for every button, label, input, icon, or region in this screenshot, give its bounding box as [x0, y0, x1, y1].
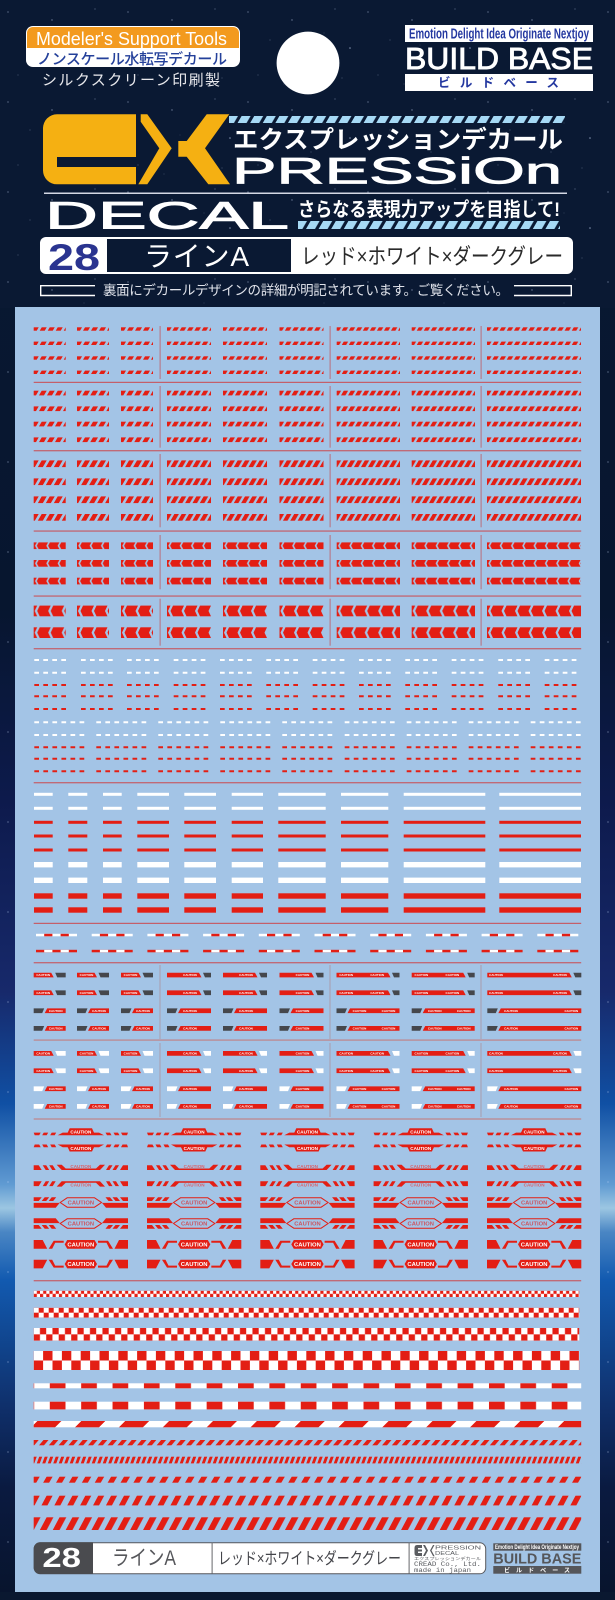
slanted red and white strip — [34, 1421, 581, 1427]
footer label: レッド×ホワイト×ダークグレー — [218, 1549, 401, 1568]
lower blue stripes — [298, 221, 560, 229]
logo: BUILD BASE: BUILD BASE — [405, 41, 593, 76]
footer label: エクスプレッションデカール — [414, 1555, 481, 1562]
footer logo: BUILD BASE: Emotion Delight Idea Originate Nextjoy — [495, 1544, 579, 1551]
title bar — [40, 237, 573, 278]
caution banners — [34, 1128, 581, 1268]
footer label: made in japan — [414, 1567, 471, 1574]
chevrons: small — [34, 542, 581, 584]
diagonal stripe strips — [34, 1440, 581, 1530]
title bar: レッド×ホワイト×ダークグレー — [301, 244, 563, 269]
DECAL wordmark: DECAL — [45, 196, 289, 238]
two-tone dashes — [36, 934, 578, 952]
badge: Modeler's Support Tools: ノンスケール水転写デカール — [37, 50, 227, 68]
note line with brackets: 裏面にデカールデザインの詳細が明記されています。ご覧ください。 — [103, 282, 509, 298]
tagline: さらなる表現力アップを目指して! — [298, 198, 560, 221]
logo: EX emblem — [43, 114, 230, 184]
PRESSION wordmark: PRESSiOn — [232, 151, 562, 192]
hazard stripes: thick — [34, 460, 581, 521]
footer label: 28 — [42, 1542, 81, 1573]
caution tabs: red and dark grey — [34, 973, 581, 1031]
white circle hang hole — [277, 32, 339, 94]
dashes: four-segment rows — [34, 660, 577, 709]
logo: BUILD BASE: ビルドベース — [438, 75, 559, 90]
footer logo: BUILD BASE: ビルドベース — [504, 1566, 570, 1574]
title bar: 28 — [48, 237, 100, 278]
checkered strips — [34, 1291, 579, 1370]
rule line — [44, 192, 567, 194]
upper blue stripes — [229, 116, 565, 123]
badge: Modeler's Support Tools — [26, 26, 240, 68]
footer label: ラインA — [112, 1547, 176, 1570]
section dividers — [34, 326, 581, 1281]
footer label: DECAL — [435, 1551, 459, 1557]
solid lines: thin and thick — [34, 793, 581, 913]
hazard stripes: medium — [34, 391, 581, 442]
footer logo: BUILD BASE: BUILD BASE — [493, 1551, 582, 1567]
chevrons: large — [34, 606, 581, 638]
hazard stripes: thin — [34, 327, 581, 374]
footer logo: BUILD BASE — [493, 1543, 582, 1574]
title bar: ラインA — [144, 241, 249, 272]
red and white block strips — [34, 1383, 581, 1409]
katakana product title: エクスプレッションデカール — [233, 125, 563, 154]
footer label: PRESSION — [435, 1546, 481, 1552]
subtitle: silk screen: シルクスクリーン印刷製 — [42, 72, 220, 89]
logo: BUILD BASE — [405, 25, 593, 91]
dashes: six-segment rows — [34, 722, 581, 771]
footer label — [34, 1542, 486, 1574]
footer label: CREAD Co., Ltd. — [414, 1561, 481, 1568]
badge: Modeler's Support Tools: Modeler's Support Tools — [36, 28, 227, 49]
panel: decal sheet — [15, 307, 600, 1592]
caution tabs: red and white — [34, 1051, 581, 1109]
